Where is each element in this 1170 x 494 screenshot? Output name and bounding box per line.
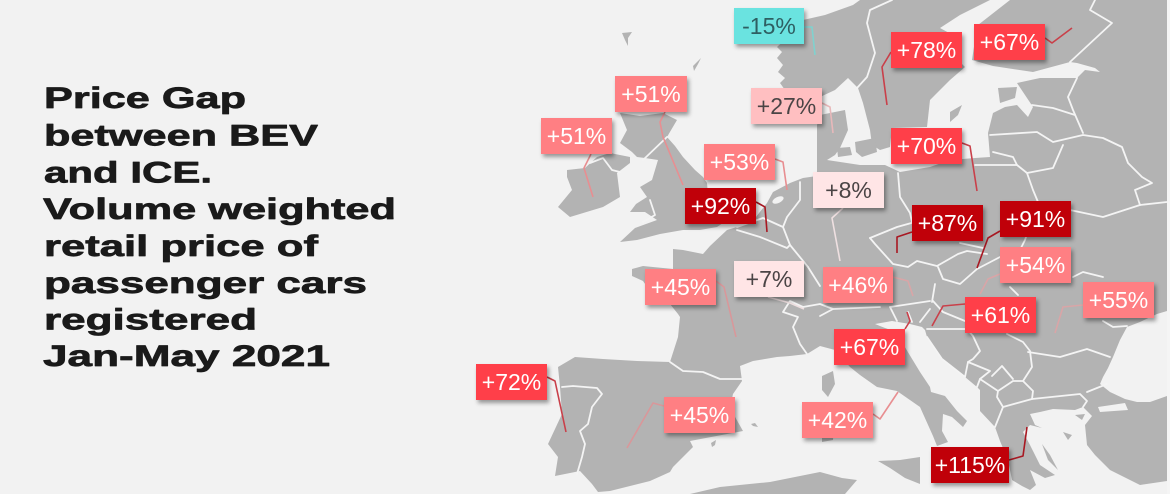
title: retail price of: [44, 230, 318, 263]
landmass: Norway and Sweden: [777, 0, 990, 150]
label: +72%: [476, 364, 547, 400]
connector: +53%: [775, 159, 787, 190]
label: +55%: [1083, 282, 1154, 318]
landmass: Ireland: [558, 153, 630, 217]
label: +51% UK: +51%: [621, 81, 681, 107]
connector: -15%: [804, 27, 815, 55]
label: +67% Italy: +67%: [840, 334, 899, 360]
label: +115%: [931, 447, 1009, 483]
connector: +55%: [1055, 305, 1083, 333]
label: +87%: [912, 205, 983, 241]
title: registered: [44, 304, 257, 336]
title: and ICE.: [44, 156, 212, 190]
label: +91%: +91%: [1006, 206, 1065, 232]
connector: +8%: [832, 208, 843, 261]
label: +27%: [751, 88, 822, 124]
title: passenger cars: [44, 267, 367, 300]
label: +45% France: +45%: [651, 274, 710, 300]
label: +45% Spain: [664, 397, 735, 433]
map edge strip: [1167, 0, 1170, 494]
connector: +54%: [980, 274, 1000, 294]
label: +61%: [965, 297, 1036, 333]
label: +8%: [813, 172, 884, 208]
label: +70%: +70%: [897, 133, 956, 159]
map of Europe: [548, 0, 1167, 494]
connector: +46%: [893, 277, 913, 296]
label: +91%: [1000, 201, 1071, 237]
label: +67% Finland: +67%: [980, 29, 1039, 55]
label: +51% Ireland: [541, 118, 612, 154]
connector lines: [547, 27, 1083, 460]
islands: [622, 32, 1085, 484]
label: +78%: +78%: [897, 37, 956, 63]
landmass: Great Britain: [620, 113, 735, 242]
label: +53%: [704, 144, 775, 180]
label: +115%: +115%: [935, 452, 1005, 478]
label: +8%: +8%: [825, 177, 872, 203]
label: +61%: +61%: [971, 302, 1030, 328]
label: +51% UK: [615, 76, 687, 112]
connector: +72%: [547, 377, 566, 432]
label: +51% Ireland: +51%: [547, 123, 606, 149]
title: Volume weighted: [43, 193, 396, 226]
label: +42%: [802, 402, 873, 438]
label: +67% Finland: [974, 24, 1045, 60]
connector: +51% UK: [660, 112, 683, 185]
label: +87%: +87%: [918, 210, 977, 236]
landmass: continental Europe: [548, 0, 1167, 492]
connector: +45% France: [716, 281, 736, 337]
connector: +61%: [932, 304, 965, 326]
country borders: [562, 0, 1167, 474]
label: -15%: [734, 8, 804, 44]
connector: +27%: [822, 103, 833, 133]
landmass: North Africa coast: [690, 472, 857, 494]
label: +70%: [891, 128, 962, 164]
label: +92%: [685, 188, 756, 224]
connector: +91%: [977, 231, 1000, 268]
connector: +87%: [897, 232, 912, 253]
label: +42%: +42%: [808, 407, 867, 433]
label: +67% Italy: [834, 329, 905, 365]
label: +78%: [891, 32, 962, 68]
connector: +7%: [768, 297, 804, 309]
label: +45% France: [645, 269, 716, 305]
label: +55%: +55%: [1089, 287, 1148, 313]
connector: +67% Italy: [905, 312, 910, 329]
label: +45% Spain: +45%: [670, 402, 729, 428]
title: Price Gap: [44, 82, 246, 115]
title: [43, 82, 396, 373]
title: Jan-May 2021: [43, 340, 330, 373]
connector: +70%: [962, 143, 977, 191]
title: between BEV: [44, 120, 318, 152]
label: +46%: [823, 267, 893, 303]
Marmara sea and lakes: [771, 195, 1128, 412]
label: +54%: +54%: [1006, 252, 1065, 278]
connector: +45% Spain: [627, 403, 664, 448]
label: -15%: -15%: [742, 13, 796, 39]
connector: +51% Ireland: [584, 154, 593, 197]
label: +54%: [1000, 247, 1071, 283]
label: +7%: +7%: [746, 266, 792, 292]
label: +53%: +53%: [710, 149, 769, 175]
label: +72%: +72%: [482, 369, 541, 395]
connector: +42%: [873, 392, 898, 419]
label: +92%: +92%: [691, 193, 750, 219]
label: +46%: +46%: [828, 272, 888, 298]
label: +27%: +27%: [757, 93, 816, 119]
connector: +78%: [882, 52, 891, 105]
connector: +67% Finland: [1045, 28, 1072, 43]
connector: +92%: [756, 202, 767, 232]
label: +7%: [734, 261, 804, 297]
connector: +115%: [1009, 427, 1027, 460]
